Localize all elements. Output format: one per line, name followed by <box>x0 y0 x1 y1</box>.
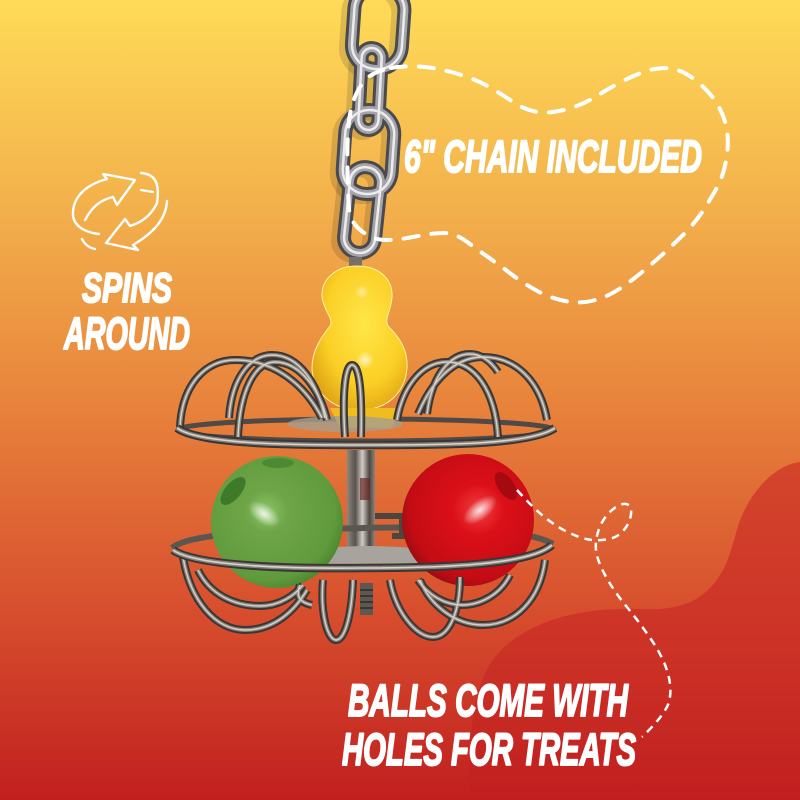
label: spins around <box>63 264 190 359</box>
dashed arrow: ball hole to caption <box>517 490 670 737</box>
bracket <box>375 516 402 536</box>
lower ring disc <box>298 546 438 566</box>
top cage arches <box>180 354 547 437</box>
lower ring front <box>173 545 552 568</box>
metal chain <box>335 0 406 257</box>
shaft mark <box>360 478 370 500</box>
label: spins around: SPINS <box>82 264 172 311</box>
background blob <box>469 462 800 800</box>
dashed callout outline: chain <box>347 66 728 302</box>
caption: balls come with holes for treats: BALLS COME WITH <box>348 675 629 726</box>
caption: balls come with holes for treats <box>342 675 636 775</box>
lower cage arches and bolt <box>183 557 545 640</box>
central shaft <box>347 450 375 556</box>
yellow bead <box>312 266 407 428</box>
product: spinning toy with chain <box>172 0 555 640</box>
chain connector <box>349 257 362 269</box>
upper ring front <box>177 428 555 445</box>
upper ring back <box>178 419 554 441</box>
label: spins around: AROUND <box>63 308 190 359</box>
red ball <box>402 454 534 586</box>
icon: rotating arrows <box>73 173 167 250</box>
caption: balls come with holes for treats: HOLES FOR TREATS <box>342 724 636 775</box>
green ball <box>211 456 343 588</box>
lower ring back <box>172 528 553 548</box>
